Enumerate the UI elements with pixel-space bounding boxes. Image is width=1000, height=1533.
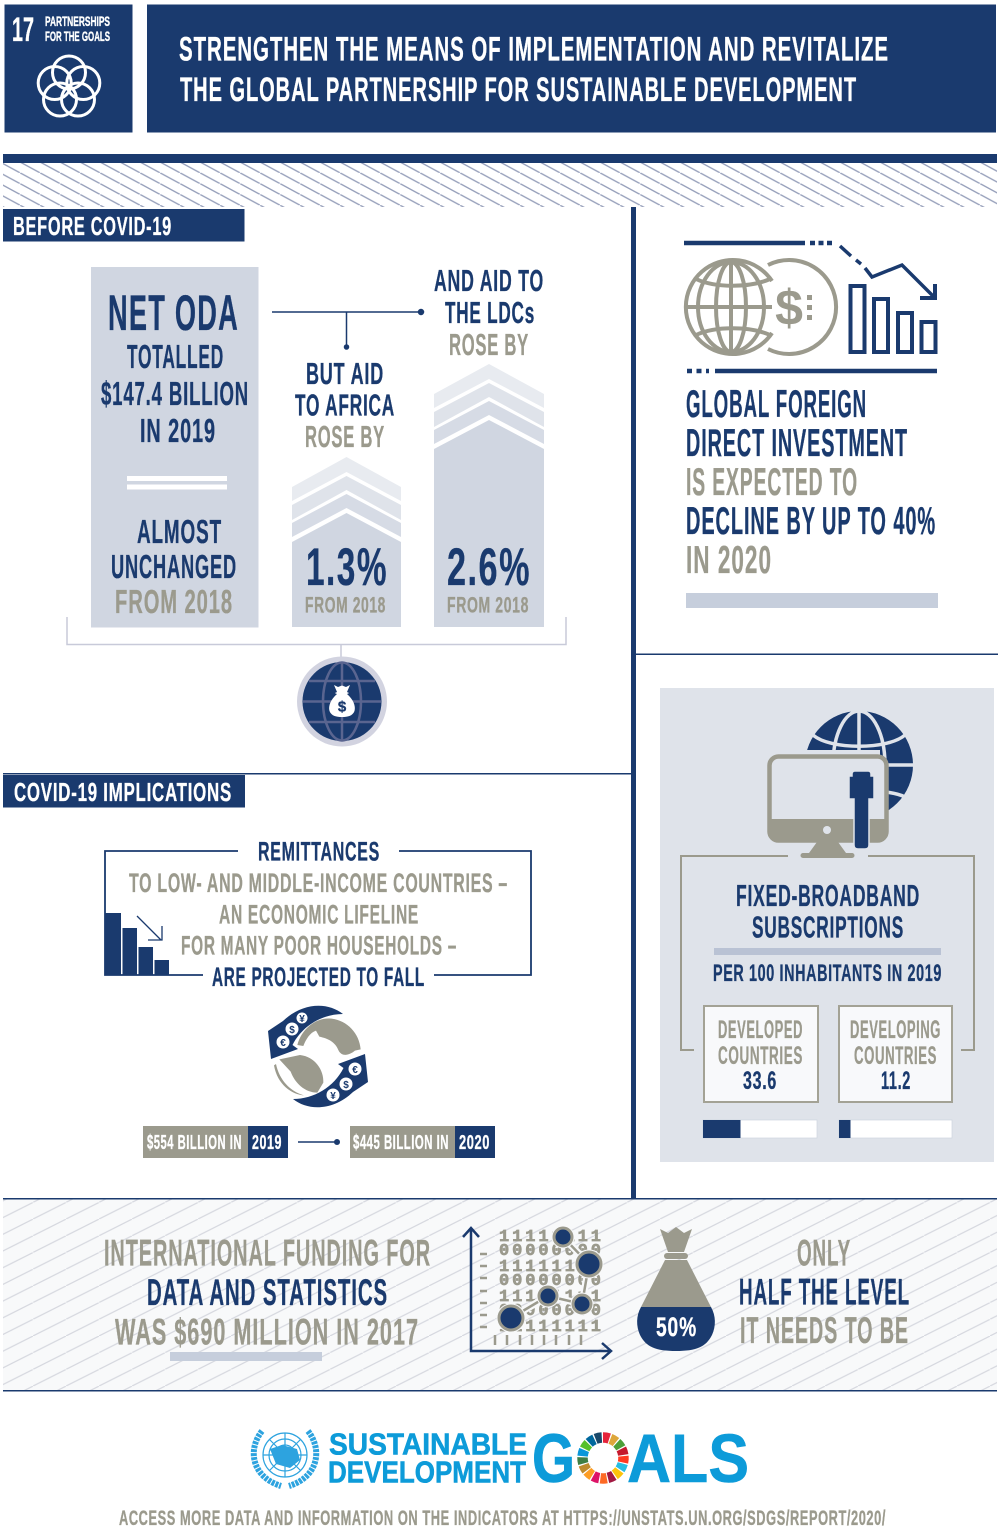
almost unchanged text: UNCHANGED [111,548,237,585]
goal 17 badge [4,4,132,132]
panel: net oda [91,267,258,628]
almost unchanged text [111,513,237,620]
icon: globe and monitor [760,711,913,860]
logo: sustainable development goals: G [532,1420,575,1497]
text: remittances: FOR MANY POOR HOUSEHOLDS – [181,930,457,960]
figure: 2019 remittances: $554 BILLION IN [147,1132,242,1154]
card: developing countries: 11.2 [881,1067,911,1095]
net oda figure text [101,285,249,449]
logo: sustainable development goals: DEVELOPMENT [328,1454,526,1490]
binary digits [499,1228,601,1337]
column: ldcs 2.6%: 2.6% [447,538,531,597]
icon: globe with currency arrows: ¥ [299,1014,305,1025]
column: africa 1.3% [292,457,401,627]
binary digits: 11111111 [499,1288,601,1307]
binary digits: 11111111 [499,1258,601,1277]
icon: sdg colour wheel [574,1429,632,1487]
logo: sustainable development goals: SUSTAINABLE [329,1426,527,1462]
net oda figure text: IN 2019 [140,412,216,449]
text: remittances [129,836,508,992]
label: aid to ldcs: AND AID TO [434,263,544,298]
text: foreign direct investment [686,383,936,582]
logo: sustainable development goals [254,1420,749,1497]
text: data and statistics funding: WAS $690 MILLION IN 2017 [115,1312,419,1352]
bracket [67,617,566,657]
goal name: FOR THE GOALS [45,29,110,44]
binary digits: 11111111 [499,1318,601,1337]
icon: data chart [463,1227,611,1359]
text: half the level [739,1232,910,1351]
card: developed countries: 33.6 [743,1067,777,1095]
card: developed countries: COUNTRIES [718,1042,803,1070]
card: developing countries [839,1006,952,1102]
column: ldcs 2.6%: FROM 2018 [447,592,529,618]
bar: developed [703,1120,817,1138]
label: aid to ldcs [434,263,544,362]
heading: covid-19 implications [3,775,245,808]
text: foreign direct investment: IN 2020 [686,539,772,582]
icon: globe with currency arrows: € [352,1065,358,1076]
arrow connector [298,1139,340,1145]
dollar coin: $ [775,280,803,336]
card: developed countries: DEVELOPED [718,1016,803,1044]
label: aid to africa: ROSE BY [305,419,385,454]
column: africa 1.3%: FROM 2018 [305,592,386,618]
icon: money bag on globe: $ [338,698,347,716]
label: aid to ldcs: THE LDCs [445,295,535,330]
net oda figure text: NET ODA [108,285,239,341]
label: aid to ldcs: ROSE BY [449,327,529,362]
logo: sustainable development goals: ALS [627,1420,749,1497]
column: africa 1.3%: 1.3% [306,538,388,597]
icon: half full money bag: 50% [656,1312,697,1342]
text: data and statistics funding [104,1232,431,1352]
remittances frame [105,851,531,975]
text: remittances: AN ECONOMIC LIFELINE [219,900,419,930]
icon: un emblem [254,1431,316,1486]
figure: 2019 remittances: 2019 [252,1132,282,1154]
title banner [147,4,996,132]
icon: globe with currency arrows: € [280,1038,286,1049]
goal name: PARTNERSHIPS [45,14,110,29]
almost unchanged text: FROM 2018 [115,583,233,620]
bracket [681,856,974,1050]
card: developed countries [704,1006,818,1102]
panel: fixed broadband [660,688,994,1162]
net oda figure text: $147.4 BILLION [101,375,249,412]
broadband heading [736,878,920,944]
icon: globe with currency arrows: $ [289,1025,295,1036]
dollar coin [768,260,836,354]
heading: covid-19 implications: COVID-19 IMPLICATIONS [14,777,232,807]
goal name [45,14,110,44]
text: data and statistics funding: INTERNATIONAL FUNDING FOR [104,1232,431,1274]
text: remittances: TO LOW- AND MIDDLE-INCOME COUNTRIES – [129,868,508,898]
icon: half full money bag [637,1227,715,1351]
label: aid to africa: BUT AID [306,356,384,391]
figure: 2019 remittances [143,1126,288,1158]
text: half the level: ONLY [797,1232,851,1274]
label: aid to africa: TO AFRICA [295,388,395,422]
goal number: 17 [12,11,34,49]
binary digits: 00000000 [499,1242,601,1261]
icon: money bag on globe [297,656,387,746]
figure: 2020 remittances: $445 BILLION IN [353,1132,449,1154]
falling bars [850,286,936,352]
binary digits: 11111111 [499,1228,601,1247]
heading: before covid-19: BEFORE COVID-19 [13,211,172,241]
bar: developing [839,1120,952,1138]
icon: five ring flower [38,56,100,116]
binary digits: 00000000 [499,1272,601,1291]
icon: falling bars [105,913,169,975]
column: ldcs 2.6% [434,364,544,627]
icon: foreign investment decline [684,243,937,371]
almost unchanged text: ALMOST [137,513,222,550]
text: remittances: ARE PROJECTED TO FALL [212,962,425,992]
figure: 2020 remittances: 2020 [459,1132,490,1154]
text: data and statistics funding: DATA AND STATISTICS [147,1272,388,1313]
text: remittances: REMITTANCES [258,836,380,866]
net oda figure text: TOTALLED [127,338,224,375]
label: aid to africa [295,356,395,454]
globe [685,260,772,354]
icon: globe with currency arrows [268,1006,368,1107]
figure: 2020 remittances [350,1126,495,1158]
binary digits: 00000000 [499,1302,601,1321]
icon: globe with currency arrows: ¥ [330,1091,336,1102]
icon: globe with currency arrows: $ [343,1080,349,1091]
connector lines [272,310,424,349]
